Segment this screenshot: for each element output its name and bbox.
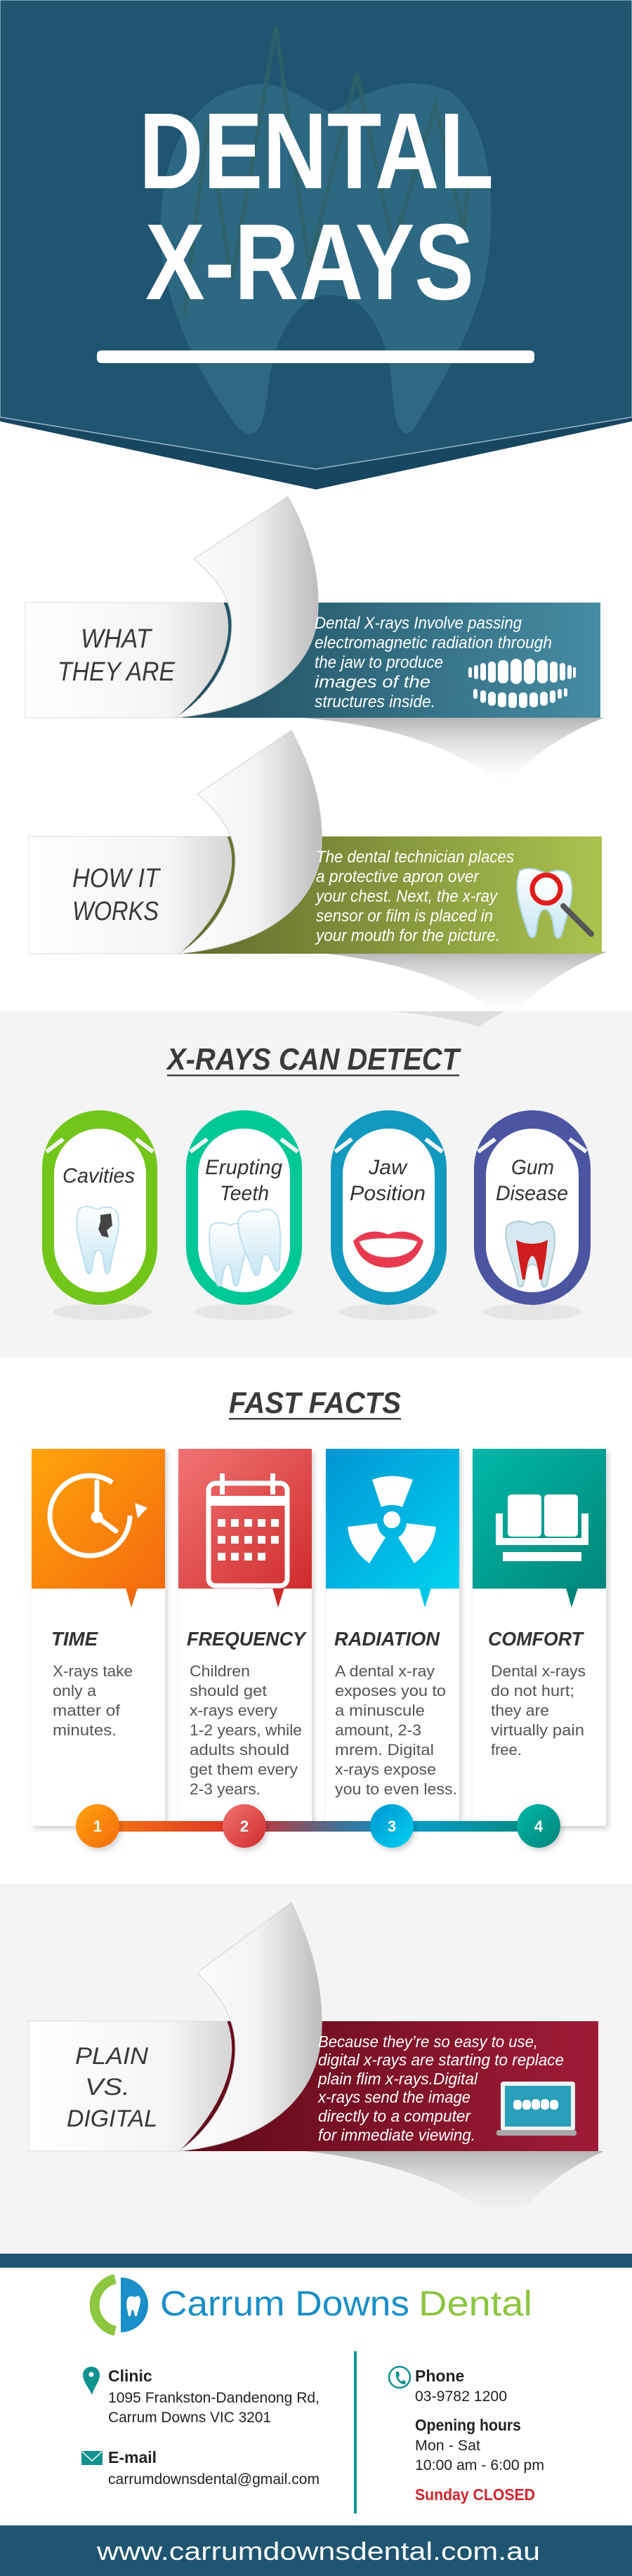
card: gum disease: Gum [511, 1156, 554, 1179]
description [317, 2032, 564, 2144]
email info [81, 2448, 320, 2488]
card: time: TIME [51, 1628, 98, 1650]
phone and hours: Phone [415, 2367, 464, 2385]
card: erupting teeth [186, 1110, 302, 1320]
card: comfort [473, 1449, 606, 1826]
phone and hours: Opening hours [415, 2416, 521, 2434]
clinic info: Carrum Downs VIC 3201 [108, 2410, 271, 2426]
card: frequency: x-rays every [190, 1702, 277, 1719]
description: a protective apron over [316, 867, 480, 886]
description: x-rays send the image [317, 2088, 470, 2106]
card: radiation [326, 1449, 459, 1826]
label [58, 624, 176, 687]
description [315, 614, 552, 711]
icon: teeth [468, 659, 576, 708]
description: digital x-rays are starting to replace [318, 2051, 564, 2069]
icon: tooth with red pulp [506, 1221, 555, 1287]
card: comfort: do not hurt; [491, 1682, 574, 1700]
card: gum disease [474, 1110, 591, 1320]
description [315, 848, 514, 945]
description: directly to a computer [318, 2107, 471, 2125]
label: DIGITAL [67, 2105, 157, 2132]
timeline [76, 1804, 560, 1848]
card: comfort: COMFORT [488, 1628, 585, 1650]
card: comfort: free. [491, 1741, 522, 1759]
card: frequency: get them every [190, 1761, 298, 1778]
card: cavities: Cavities [62, 1164, 135, 1188]
panel: fast facts [32, 1386, 606, 1848]
panel: what they are [25, 497, 604, 789]
card: comfort: they are [491, 1702, 549, 1719]
icon: clock [50, 1476, 147, 1556]
description: electromagnetic radiation through [315, 633, 552, 652]
description: Dental X-rays Involve passing [315, 614, 522, 633]
description: for immediate viewing. [318, 2126, 475, 2144]
card: comfort: virtually pain [491, 1721, 584, 1739]
card: radiation: mrem. Digital [335, 1741, 434, 1759]
phone and hours: 10:00 am - 6:00 pm [415, 2457, 544, 2473]
heading: X-RAYS CAN DETECT [165, 1042, 461, 1077]
label: VS. [85, 2074, 130, 2101]
clinic info [83, 2367, 320, 2426]
description: sensor or film is placed in [316, 907, 493, 926]
timeline: 2 [240, 1818, 249, 1835]
clinic info: 1095 Frankston-Dandenong Rd, [108, 2390, 320, 2406]
timeline: 4 [534, 1818, 544, 1835]
icon: tooth with magnifier [517, 869, 591, 938]
card: frequency: 2-3 years. [190, 1780, 261, 1798]
card: frequency: should get [190, 1682, 267, 1700]
card: jaw position [331, 1110, 447, 1320]
icon: radiation [348, 1476, 436, 1563]
label: WHAT [81, 624, 153, 654]
phone and hours: 03-9782 1200 [415, 2388, 507, 2405]
title [139, 91, 494, 322]
title: X-RAYS [145, 202, 474, 322]
card: jaw position: Jaw [368, 1156, 408, 1179]
panel: how it works [29, 730, 607, 1023]
label: PLAIN [75, 2043, 148, 2070]
icon: sofa [496, 1494, 588, 1561]
card: cavities [42, 1110, 157, 1320]
card: radiation: RADIATION [334, 1628, 440, 1650]
label: WORKS [72, 897, 159, 926]
phone and hours: Mon - Sat [415, 2438, 480, 2454]
footer: website: www.carrumdownsdental.com.au [96, 2537, 540, 2565]
phone and hours: Sunday CLOSED [415, 2485, 535, 2504]
card: frequency: 1-2 years, while [190, 1721, 302, 1739]
logo [95, 2278, 532, 2332]
card: time: only a [53, 1682, 97, 1700]
description: your mouth for the picture. [315, 926, 500, 945]
card: radiation: exposes you to [335, 1682, 446, 1700]
footer: contact [0, 2254, 632, 2525]
card: radiation: a minuscule [335, 1702, 425, 1719]
card: frequency [178, 1449, 312, 1826]
panel: plain vs digital [0, 1884, 632, 2254]
card: time [32, 1449, 165, 1826]
card: erupting teeth: Teeth [220, 1182, 269, 1205]
description: Because they’re so easy to use, [318, 2032, 538, 2051]
phone and hours [389, 2367, 544, 2504]
email info: carrumdownsdental@gmail.com [108, 2471, 320, 2488]
label [72, 864, 162, 926]
card: frequency: FREQUENCY [187, 1628, 307, 1650]
panel: x-rays can detect [0, 1011, 632, 1358]
email info: E-mail [108, 2448, 157, 2466]
card: frequency: adults should [190, 1741, 289, 1759]
description: your chest. Next, the x-ray [315, 887, 499, 906]
description: structures inside. [315, 692, 435, 711]
icon: laptop [496, 2082, 577, 2136]
card: radiation: you to even less. [335, 1780, 457, 1798]
description: the jaw to produce [315, 653, 443, 672]
icon: smiling lips [353, 1232, 423, 1268]
label: THEY ARE [58, 657, 176, 687]
card: time: matter of [53, 1702, 121, 1719]
card: time: minutes. [53, 1721, 117, 1739]
header banner [0, 0, 632, 489]
card: radiation: amount, 2-3 [335, 1721, 421, 1739]
logo: Carrum Downs [160, 2284, 409, 2323]
icon: erupting teeth [209, 1209, 280, 1286]
label [67, 2043, 157, 2132]
ghost tooth background [161, 27, 491, 434]
description: plain flim x-rays.Digital [317, 2070, 478, 2088]
card: radiation: x-rays expose [335, 1761, 436, 1778]
heading: FAST FACTS [229, 1386, 401, 1420]
title underline bar [97, 350, 534, 363]
title: DENTAL [139, 91, 494, 211]
card: frequency: Children [190, 1662, 250, 1680]
footer: website [0, 2525, 632, 2576]
card: erupting teeth: Erupting [205, 1156, 282, 1179]
logo: Dental [419, 2284, 532, 2323]
icon: decayed tooth [77, 1207, 119, 1274]
description: images of the [315, 673, 430, 692]
timeline: 3 [388, 1818, 396, 1835]
description: The dental technician places [316, 848, 514, 867]
card: radiation: A dental x-ray [335, 1662, 435, 1680]
icon: calendar [209, 1473, 287, 1586]
timeline: 1 [93, 1818, 102, 1835]
card: gum disease: Disease [496, 1182, 568, 1205]
card: jaw position: Position [350, 1182, 426, 1205]
clinic info: Clinic [108, 2367, 152, 2385]
card: comfort: Dental x-rays [491, 1662, 586, 1680]
label: HOW IT [72, 864, 162, 893]
card: time: X-rays take [53, 1662, 133, 1680]
